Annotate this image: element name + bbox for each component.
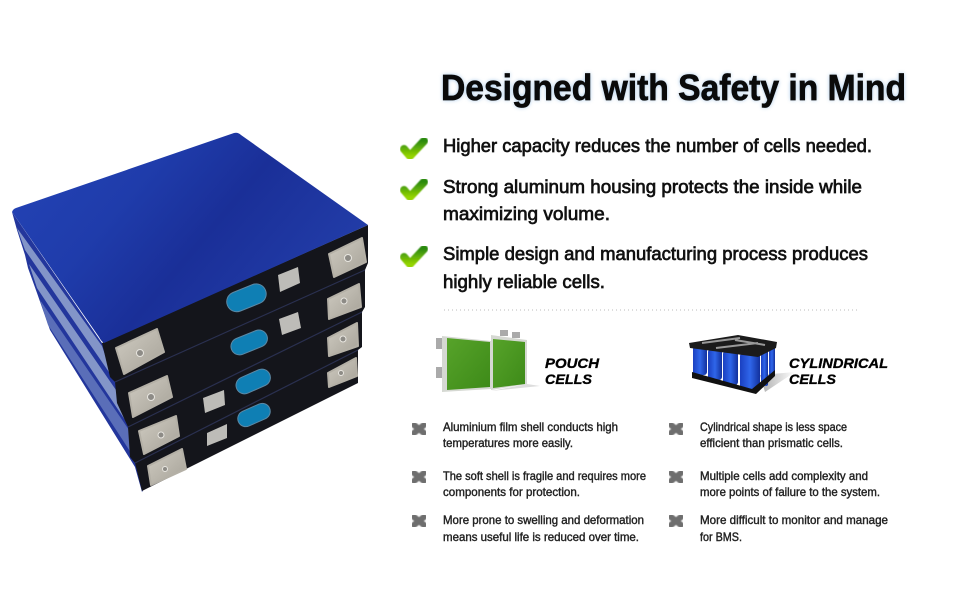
pouch cells label	[545, 355, 600, 387]
stack front black faces	[102, 225, 368, 491]
blue vents	[224, 281, 273, 429]
icon: pouch cells	[436, 330, 540, 392]
benefit 2: maximizing volume.	[443, 203, 610, 224]
drawback 3: for BMS.	[700, 530, 742, 544]
drawback 1: Aluminium film shell conducts high	[443, 420, 618, 434]
check icon 3	[404, 249, 424, 264]
pouch cells label: CELLS	[545, 371, 593, 387]
pouch drawbacks	[414, 420, 646, 544]
cross icon	[671, 517, 681, 525]
benefit 1: Higher capacity reduces the number of cells needed.	[443, 135, 872, 156]
drawback 3: More prone to swelling and deformation	[443, 513, 644, 527]
cylindrical cells label: CYLINDRICAL	[789, 355, 888, 371]
cylindrical drawbacks	[671, 420, 888, 544]
cross icon	[414, 473, 424, 481]
drawback 3	[443, 513, 644, 544]
benefit 2: Strong aluminum housing protects the inside while	[443, 176, 862, 197]
terminal bolts	[136, 254, 352, 472]
check icon 1	[404, 141, 424, 156]
QR labels	[203, 267, 301, 446]
benefit 3	[443, 243, 868, 292]
benefits list	[404, 135, 872, 292]
cross icon	[671, 473, 681, 481]
icon: cylindrical cells	[689, 335, 795, 394]
title glow: Designed with Safety in Mind	[441, 67, 906, 108]
drawback 2: The soft shell is fragile and requires more	[443, 469, 646, 483]
check icon 2	[404, 182, 424, 197]
benefit 3: Simple design and manufacturing process produces	[443, 243, 868, 264]
drawback 2	[700, 469, 880, 499]
drawback 2: more points of failure to the system.	[700, 485, 880, 499]
cylindrical cells label: CELLS	[789, 371, 837, 387]
stack side	[12, 212, 150, 492]
top face	[12, 133, 368, 343]
cylindrical cells label	[789, 355, 888, 387]
panel: pouch cells	[414, 330, 646, 544]
drawback 1	[443, 420, 618, 450]
cross icon	[414, 517, 424, 525]
side highlights	[17, 228, 125, 420]
drawback 1: efficient than prismatic cells.	[700, 436, 843, 450]
drawback 2	[443, 469, 646, 499]
drawback 3: means useful life is reduced over time.	[443, 530, 639, 544]
drawback 3	[700, 513, 888, 544]
panel: cylindrical cells	[671, 335, 888, 544]
title: Designed with Safety in Mind	[441, 67, 906, 108]
terminal tabs	[116, 238, 366, 485]
drawback 2: components for protection.	[443, 485, 580, 499]
benefit 2	[443, 176, 862, 224]
pouch cells label: POUCH	[545, 355, 600, 371]
drawback 1: Cylindrical shape is less space	[700, 420, 847, 434]
cross icon	[414, 425, 424, 433]
cross icon	[671, 425, 681, 433]
drawback 1: temperatures more easily.	[443, 436, 573, 450]
drawback 1	[700, 420, 847, 450]
drawback 3: More difficult to monitor and manage	[700, 513, 888, 527]
cell seams	[115, 270, 365, 463]
battery stack photo	[12, 133, 368, 492]
drawback 2: Multiple cells add complexity and	[700, 469, 868, 483]
benefit 3: highly reliable cells.	[443, 271, 605, 292]
